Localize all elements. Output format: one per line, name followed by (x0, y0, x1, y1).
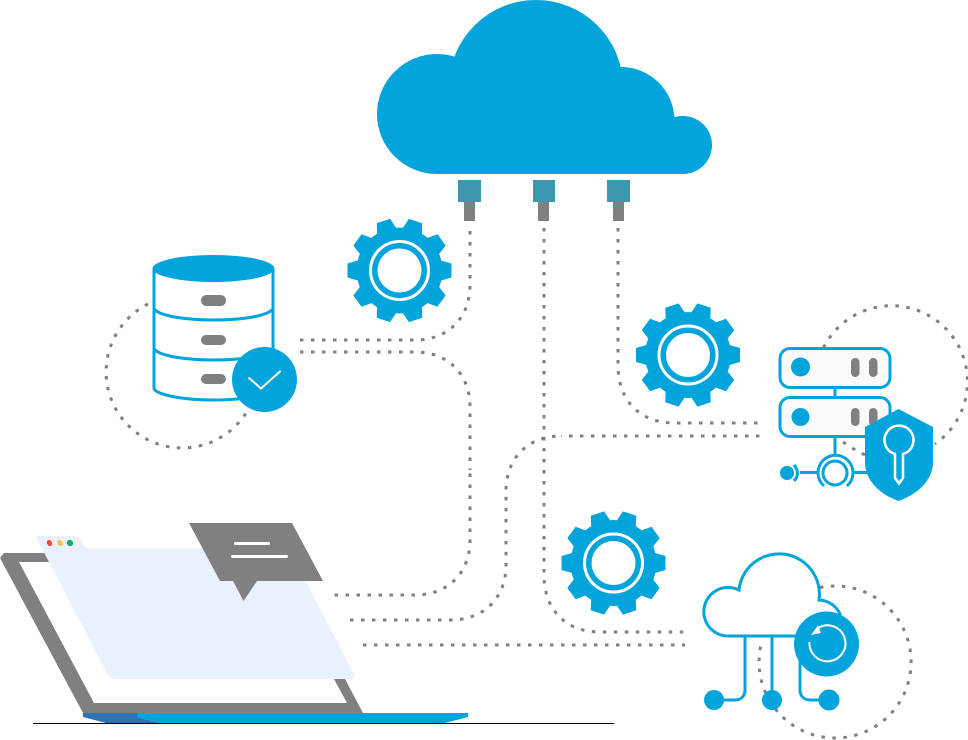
cloud connector: left (458, 180, 481, 221)
dotted circle: database (106, 304, 249, 448)
icon: cloud backup (704, 554, 859, 710)
laptop base: bright side (137, 713, 468, 724)
cloud (377, 0, 712, 174)
dotted circle: server (824, 306, 967, 444)
dotted arc: server lower (843, 442, 865, 455)
dotted connector lines (300, 228, 760, 645)
icon: database (152, 255, 297, 412)
laptop (0, 553, 468, 724)
icon: gear bottom (562, 510, 666, 616)
browser window panel (37, 536, 354, 679)
laptop screen frame (0, 553, 363, 713)
icon: refresh badge (794, 612, 859, 676)
icon: gear top (348, 218, 452, 323)
speech bubble (189, 523, 323, 601)
laptop screen inner (19, 562, 347, 703)
icon: check badge (232, 347, 297, 412)
cloud connector: right (607, 180, 630, 221)
ground line (33, 723, 614, 724)
icon: gear right (636, 302, 740, 408)
icon: server with shield (780, 348, 933, 501)
icon: shield with keyhole (865, 409, 933, 501)
dotted circle: cloud backup (759, 586, 911, 738)
laptop base: dark side (83, 713, 162, 724)
cloud connector: centre (533, 180, 555, 221)
